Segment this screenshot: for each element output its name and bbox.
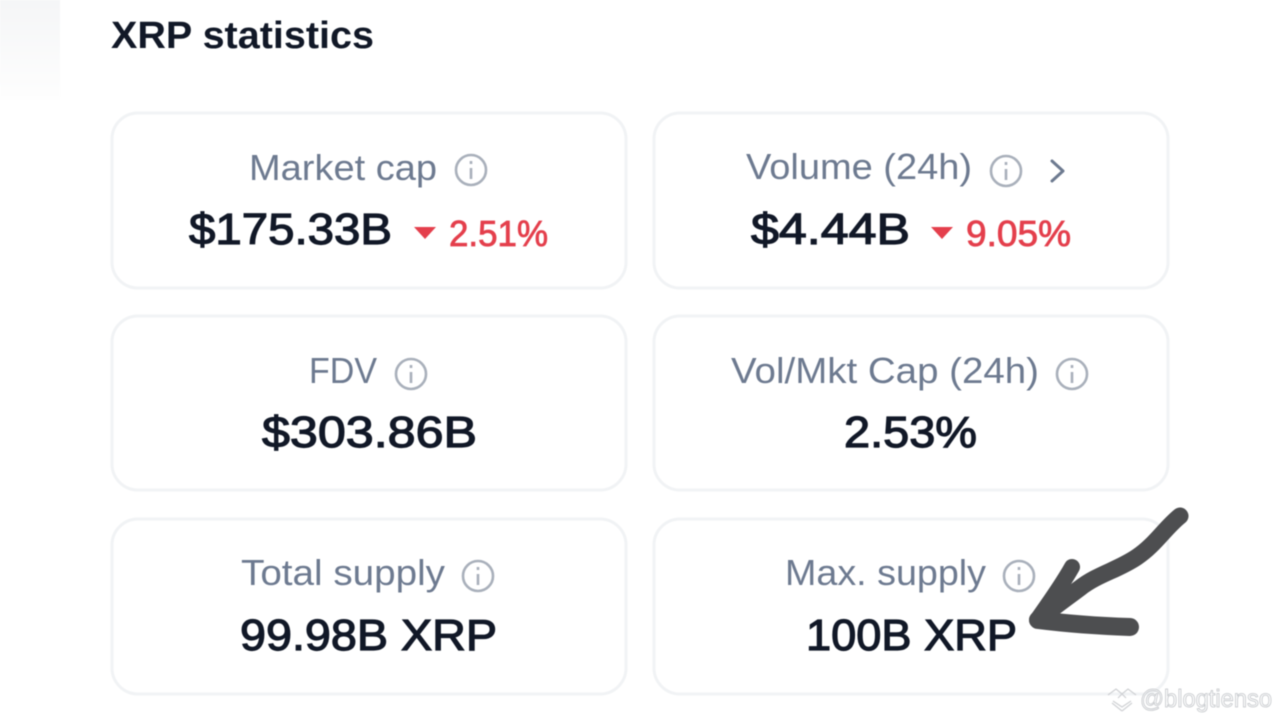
icon: info xyxy=(463,561,493,591)
panel: total supply xyxy=(112,519,626,694)
value: FDV: $303.86B xyxy=(262,408,477,457)
label: total supply: Total supply xyxy=(241,552,445,593)
icon: down triangle xyxy=(414,227,436,239)
change: volume: 9.05% xyxy=(966,213,1071,254)
arrow: hand-drawn xyxy=(1037,516,1180,627)
label: market cap: Market cap xyxy=(249,147,437,188)
icon: chevron xyxy=(1052,161,1063,181)
label: volume: Volume (24h) xyxy=(746,146,972,187)
panel: market cap xyxy=(112,113,626,288)
icon: down triangle xyxy=(931,227,953,239)
icon: info xyxy=(1004,561,1034,591)
icon: info xyxy=(991,156,1021,186)
label: FDV: FDV xyxy=(309,350,377,391)
icon: info xyxy=(396,359,426,389)
text: watermark handle: @blogtienso xyxy=(1140,685,1272,713)
value: vol/mkt cap: 2.53% xyxy=(844,408,977,457)
label: vol/mkt cap: Vol/Mkt Cap (24h) xyxy=(731,350,1039,391)
change: market cap: 2.51% xyxy=(449,213,548,254)
icon: info xyxy=(1057,359,1087,389)
value: volume: $4.44B xyxy=(751,205,910,254)
panel: volume xyxy=(654,113,1168,288)
panel: FDV xyxy=(112,316,626,490)
panel: max supply xyxy=(654,519,1168,694)
title: XRP statistics xyxy=(111,15,374,57)
label: max supply: Max. supply xyxy=(785,552,986,593)
watermark xyxy=(1108,685,1272,713)
value: market cap: $175.33B xyxy=(189,205,392,254)
value: total supply: 99.98B XRP xyxy=(240,611,497,660)
icon: watermark logo xyxy=(1108,689,1136,711)
value: max supply: 100B XRP xyxy=(806,611,1017,660)
icon: info xyxy=(456,155,486,185)
panel: vol/mkt cap xyxy=(654,316,1168,490)
